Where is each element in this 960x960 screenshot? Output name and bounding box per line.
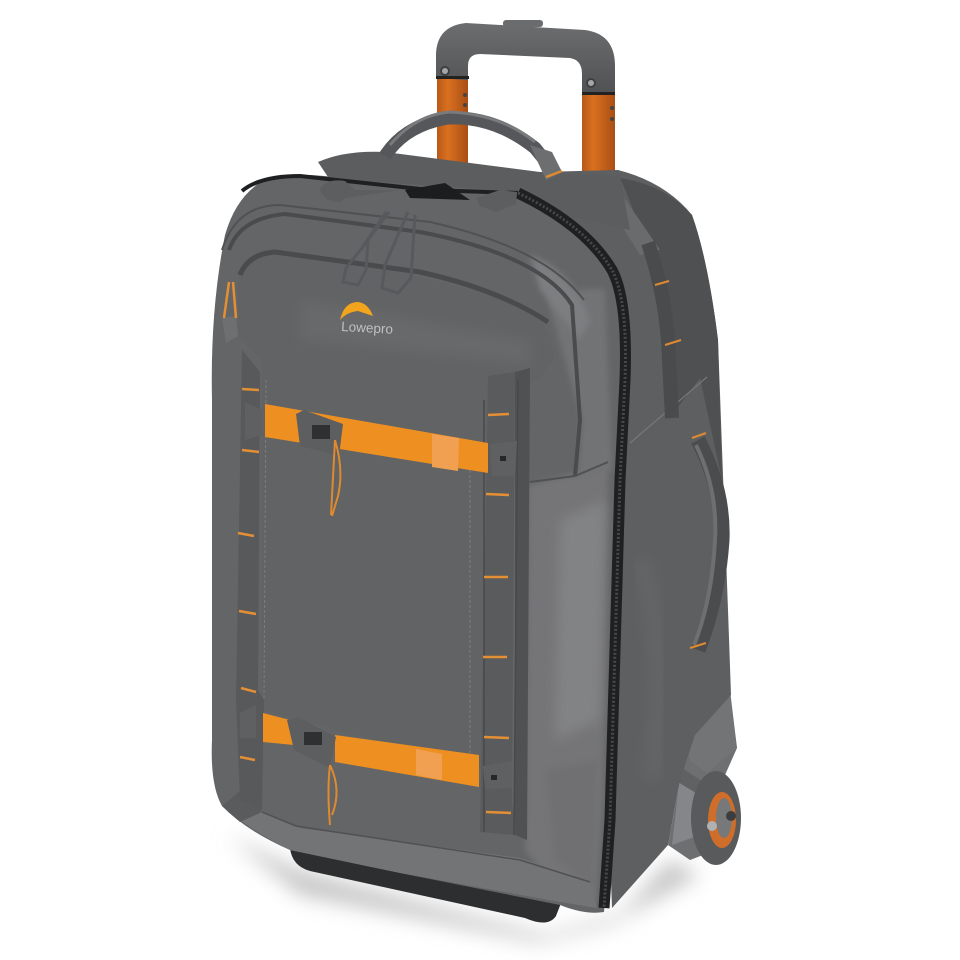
side zip pull — [222, 316, 238, 343]
wheel assembly — [668, 690, 741, 865]
lower orange strap and buckle — [240, 705, 512, 825]
bottom skid — [290, 825, 568, 923]
pull cord — [331, 440, 340, 516]
telescoping handle — [436, 20, 615, 182]
grip — [436, 23, 615, 95]
buckle anchor — [490, 441, 517, 476]
inner front pocket — [238, 250, 554, 770]
upper gusset band — [548, 289, 612, 478]
base panel — [222, 800, 597, 908]
logo — [340, 302, 393, 337]
wheel — [691, 771, 741, 865]
pull cord — [328, 765, 337, 825]
buckle anchor — [483, 761, 512, 789]
zipper pulls — [222, 180, 517, 343]
logo: Lowepro — [341, 319, 393, 337]
side gusset band — [525, 465, 608, 905]
main zipper — [242, 176, 518, 193]
side carry handle — [698, 440, 722, 650]
floor shadow — [228, 835, 700, 942]
orange poles — [437, 78, 615, 182]
side panel — [540, 170, 731, 908]
vertical webbing straps — [236, 350, 530, 840]
top carry handle — [385, 112, 562, 180]
upper orange strap and buckle — [245, 402, 517, 516]
top panel behind zipper — [318, 152, 630, 230]
front panel body — [212, 175, 626, 913]
orange bartack stitches — [238, 389, 511, 813]
side strap — [648, 243, 672, 418]
